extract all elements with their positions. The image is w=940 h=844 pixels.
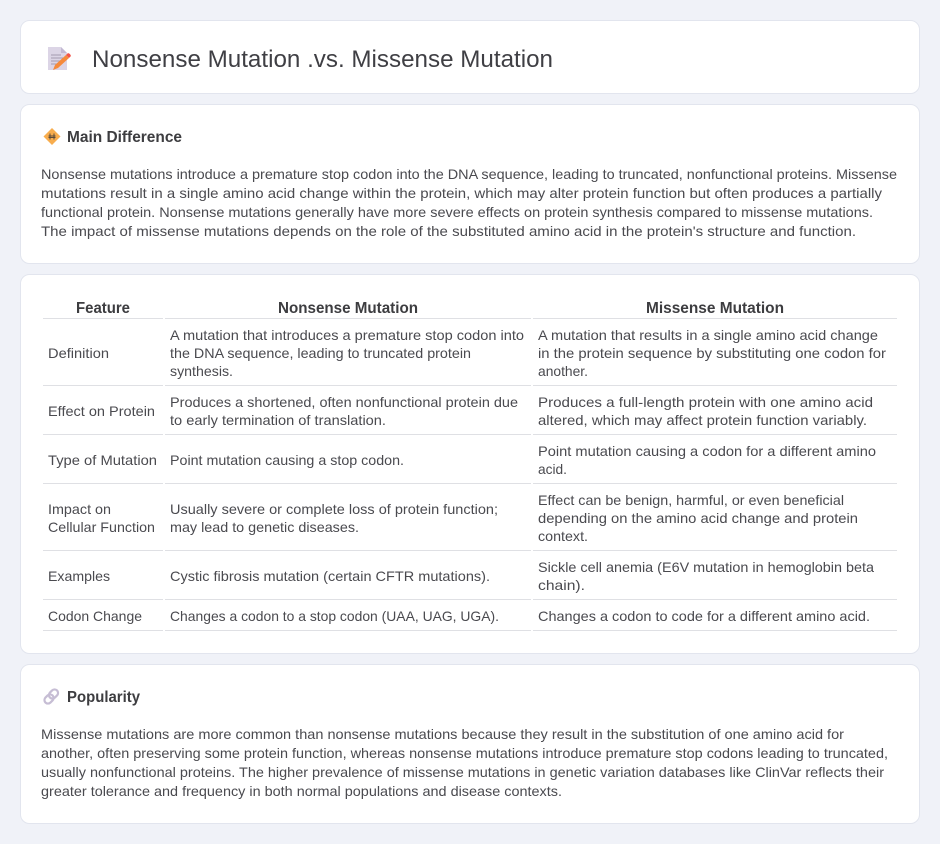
row: examples: Examples bbox=[48, 568, 110, 584]
row: impact on cellular function bbox=[48, 492, 858, 544]
row: impact on cellular function: Cellular Function bbox=[48, 519, 155, 535]
row: examples: Sickle cell anemia (E6V mutation in hemoglobin beta bbox=[538, 559, 874, 575]
panel: popularity bbox=[20, 664, 920, 824]
row: type of mutation: acid. bbox=[538, 461, 567, 477]
row: examples: Cystic fibrosis mutation (certain CFTR mutations). bbox=[170, 568, 490, 584]
row: impact on cellular function: depending on the amino acid change and protein bbox=[538, 510, 858, 526]
icon: document with pencil bbox=[48, 47, 71, 70]
text block: main difference bbox=[41, 166, 897, 239]
text block: popularity: usually nonfunctional proteins. The higher prevalence of missense mutations in genetic variation databases like ClinVar reflects their bbox=[41, 764, 884, 780]
row: type of mutation: Point mutation causing a codon for a different amino bbox=[538, 443, 876, 459]
row: type of mutation: Type of Mutation bbox=[48, 452, 157, 468]
table header: Feature bbox=[76, 300, 130, 317]
row: codon change: Changes a codon to a stop codon (UAA, UAG, UGA). bbox=[170, 608, 499, 624]
row: type of mutation: Point mutation causing a stop codon. bbox=[170, 452, 404, 468]
row: effect on protein: Effect on Protein bbox=[48, 403, 155, 419]
row: codon change: Changes a codon to code for a different amino acid. bbox=[538, 608, 870, 624]
row: definition: in the protein sequence by substituting one codon for bbox=[538, 345, 886, 361]
text block: popularity bbox=[41, 726, 888, 799]
row: impact on cellular function: Usually severe or complete loss of protein function; bbox=[170, 501, 498, 517]
title: Nonsense Mutation .vs. Missense Mutation bbox=[92, 46, 553, 73]
row: definition: Definition bbox=[48, 345, 109, 361]
text block: main difference: The impact of missense mutations depends on the role of the substituted amino acid in the protein's structure and function. bbox=[41, 223, 856, 239]
row: examples: chain). bbox=[538, 577, 585, 593]
icon: warning diamond bbox=[44, 128, 60, 145]
row: codon change: Codon Change bbox=[48, 608, 142, 624]
row: impact on cellular function: may lead to genetic diseases. bbox=[170, 519, 359, 535]
heading: popularity: Popularity bbox=[67, 689, 140, 706]
row: definition: the DNA sequence, leading to truncated protein bbox=[170, 345, 471, 361]
panel: comparison table bbox=[20, 274, 920, 654]
table header: Nonsense Mutation bbox=[278, 300, 418, 317]
row: definition: another. bbox=[538, 363, 588, 379]
panel: header bbox=[20, 20, 920, 94]
row: definition bbox=[48, 327, 886, 379]
text block: main difference: mutations result in a single amino acid change within the protein, which may alter protein function but often produces a partially bbox=[41, 185, 882, 201]
row: definition: synthesis. bbox=[170, 363, 233, 379]
row: effect on protein: Produces a shortened, often nonfunctional protein due bbox=[170, 394, 518, 410]
text block: popularity: greater tolerance and frequency in both normal populations and disease contexts. bbox=[41, 783, 562, 799]
text block: popularity: Missense mutations are more common than nonsense mutations because they result in the substitution of one amino acid for bbox=[41, 726, 844, 742]
icon: link bbox=[43, 688, 60, 705]
row: definition: A mutation that introduces a premature stop codon into bbox=[170, 327, 524, 343]
text block: main difference: functional protein. Nonsense mutations generally have more severe effects on protein synthesis compared to missense mutations. bbox=[41, 204, 873, 220]
row: codon change bbox=[48, 608, 870, 624]
row: effect on protein: to early termination of translation. bbox=[170, 412, 386, 428]
row: effect on protein bbox=[48, 394, 873, 428]
row: effect on protein: Produces a full-length protein with one amino acid bbox=[538, 394, 873, 410]
table header: Missense Mutation bbox=[646, 300, 784, 317]
heading: main difference: Main Difference bbox=[67, 129, 182, 146]
row: type of mutation bbox=[48, 443, 876, 477]
text block: main difference: Nonsense mutations introduce a premature stop codon into the DNA sequence, leading to truncated, nonfunctional proteins. Missense bbox=[41, 166, 897, 182]
row: impact on cellular function: Effect can be benign, harmful, or even beneficial bbox=[538, 492, 844, 508]
row: impact on cellular function: Impact on bbox=[48, 501, 111, 517]
row: definition: A mutation that results in a single amino acid change bbox=[538, 327, 878, 343]
row: impact on cellular function: context. bbox=[538, 528, 588, 544]
row: examples bbox=[48, 559, 874, 593]
row: effect on protein: altered, which may affect protein function variably. bbox=[538, 412, 867, 428]
table header bbox=[76, 300, 784, 317]
panel: main difference bbox=[20, 104, 920, 264]
text block: popularity: another, often preserving some protein function, whereas nonsense mutations introduce premature stop codons leading to truncated, bbox=[41, 745, 888, 761]
